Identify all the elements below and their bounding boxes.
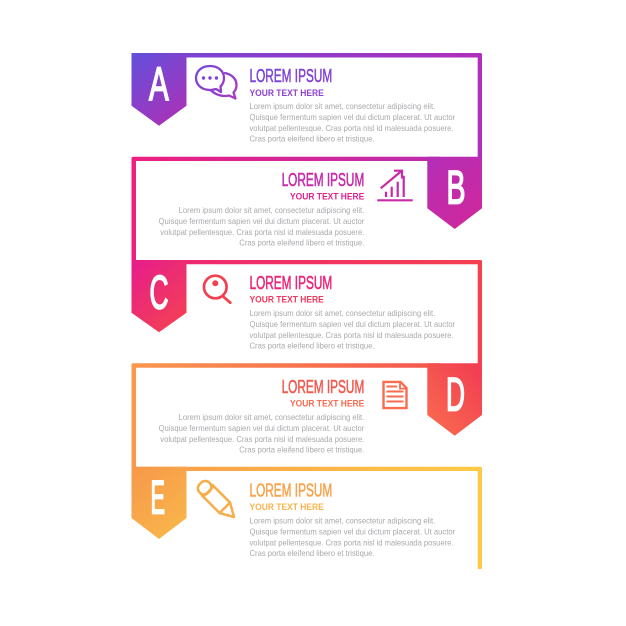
- text block: section E: Cras porta eleifend libero et tristique.: [250, 548, 374, 558]
- text block: section D: Quisque fermentum sapien vel dui dictum placerat. Ut auctor: [159, 423, 365, 433]
- heading: section D: LOREM IPSUM: [282, 377, 364, 397]
- text block: section D: volutpat pellentesque. Cras porta nisl id malesuada posuere.: [160, 434, 364, 444]
- text block: section B: volutpat pellentesque. Cras porta nisl id malesuada posuere.: [160, 227, 364, 237]
- text block: section A: Lorem ipsum dolor sit amet, consectetur adipiscing elit.: [250, 101, 435, 111]
- text block: section B: Lorem ipsum dolor sit amet, consectetur adipiscing elit.: [179, 205, 364, 215]
- text block: section A: [250, 101, 455, 144]
- panel: section A: [132, 53, 482, 158]
- text block: section B: Cras porta eleifend libero et tristique.: [239, 238, 364, 248]
- subheading: section E: YOUR TEXT HERE: [250, 502, 324, 512]
- frame: section D border: [132, 363, 440, 519]
- icon: document: [384, 382, 406, 408]
- text block: section C: Lorem ipsum dolor sit amet, consectetur adipiscing elit.: [250, 308, 435, 318]
- heading: section B: LOREM IPSUM: [282, 170, 364, 190]
- frame: section E border: [132, 467, 482, 569]
- tab: letter E: [132, 467, 186, 539]
- frame: section B border: [132, 157, 440, 262]
- letter A: A: [149, 58, 169, 111]
- heading: section E: LOREM IPSUM: [250, 480, 332, 500]
- subheading: section D: YOUR TEXT HERE: [290, 398, 364, 408]
- tab: letter C: [132, 260, 186, 332]
- text block: section A: Cras porta eleifend libero et tristique.: [250, 134, 374, 144]
- panel: section E: E: [150, 472, 165, 525]
- text block: section D: [159, 412, 365, 454]
- icon: magnifier: [204, 276, 230, 303]
- subheading: section A: YOUR TEXT HERE: [250, 88, 324, 98]
- text block: section E: Quisque fermentum sapien vel dui dictum placerat. Ut auctor: [250, 526, 455, 536]
- letter D: D: [446, 368, 465, 421]
- text block: section D: Cras porta eleifend libero et tristique.: [239, 444, 364, 454]
- heading: section C: LOREM IPSUM: [250, 273, 332, 293]
- text block: section E: Lorem ipsum dolor sit amet, consectetur adipiscing elit.: [250, 516, 435, 526]
- heading: section A: LOREM IPSUM: [250, 66, 332, 86]
- text block: section B: [159, 205, 365, 248]
- text block: section C: volutpat pellentesque. Cras porta nisl id malesuada posuere.: [250, 330, 454, 340]
- subheading: section C: YOUR TEXT HERE: [250, 294, 324, 304]
- text block: section A: volutpat pellentesque. Cras porta nisl id malesuada posuere.: [250, 123, 454, 133]
- panel: section D: [132, 363, 482, 519]
- text block: section C: [250, 308, 455, 350]
- text block: section E: volutpat pellentesque. Cras porta nisl id malesuada posuere.: [250, 538, 454, 548]
- frame: section A border: [132, 53, 482, 158]
- panel: section E: [132, 467, 482, 569]
- text block: section C: Quisque fermentum sapien vel dui dictum placerat. Ut auctor: [250, 319, 455, 329]
- letter C: C: [150, 266, 168, 319]
- icon: chat bubbles: [196, 66, 236, 98]
- tab: letter A: [132, 53, 186, 126]
- panel: section B: [132, 157, 482, 262]
- tab: letter D: [427, 363, 482, 436]
- text block: section D: Lorem ipsum dolor sit amet, consectetur adipiscing elit.: [179, 412, 364, 422]
- text block: section A: Quisque fermentum sapien vel dui dictum placerat. Ut auctor: [250, 112, 455, 122]
- icon: growth chart: [377, 171, 413, 200]
- text block: section E: [250, 516, 455, 558]
- letter B: B: [446, 162, 466, 215]
- frame: section C border: [132, 260, 482, 364]
- panel: section C: [132, 260, 482, 364]
- subheading: section B: YOUR TEXT HERE: [290, 192, 364, 202]
- text block: section B: Quisque fermentum sapien vel dui dictum placerat. Ut auctor: [159, 216, 365, 226]
- icon: pencil: [195, 478, 239, 522]
- tab: letter B: [427, 157, 482, 229]
- text block: section C: Cras porta eleifend libero et tristique.: [250, 340, 374, 350]
